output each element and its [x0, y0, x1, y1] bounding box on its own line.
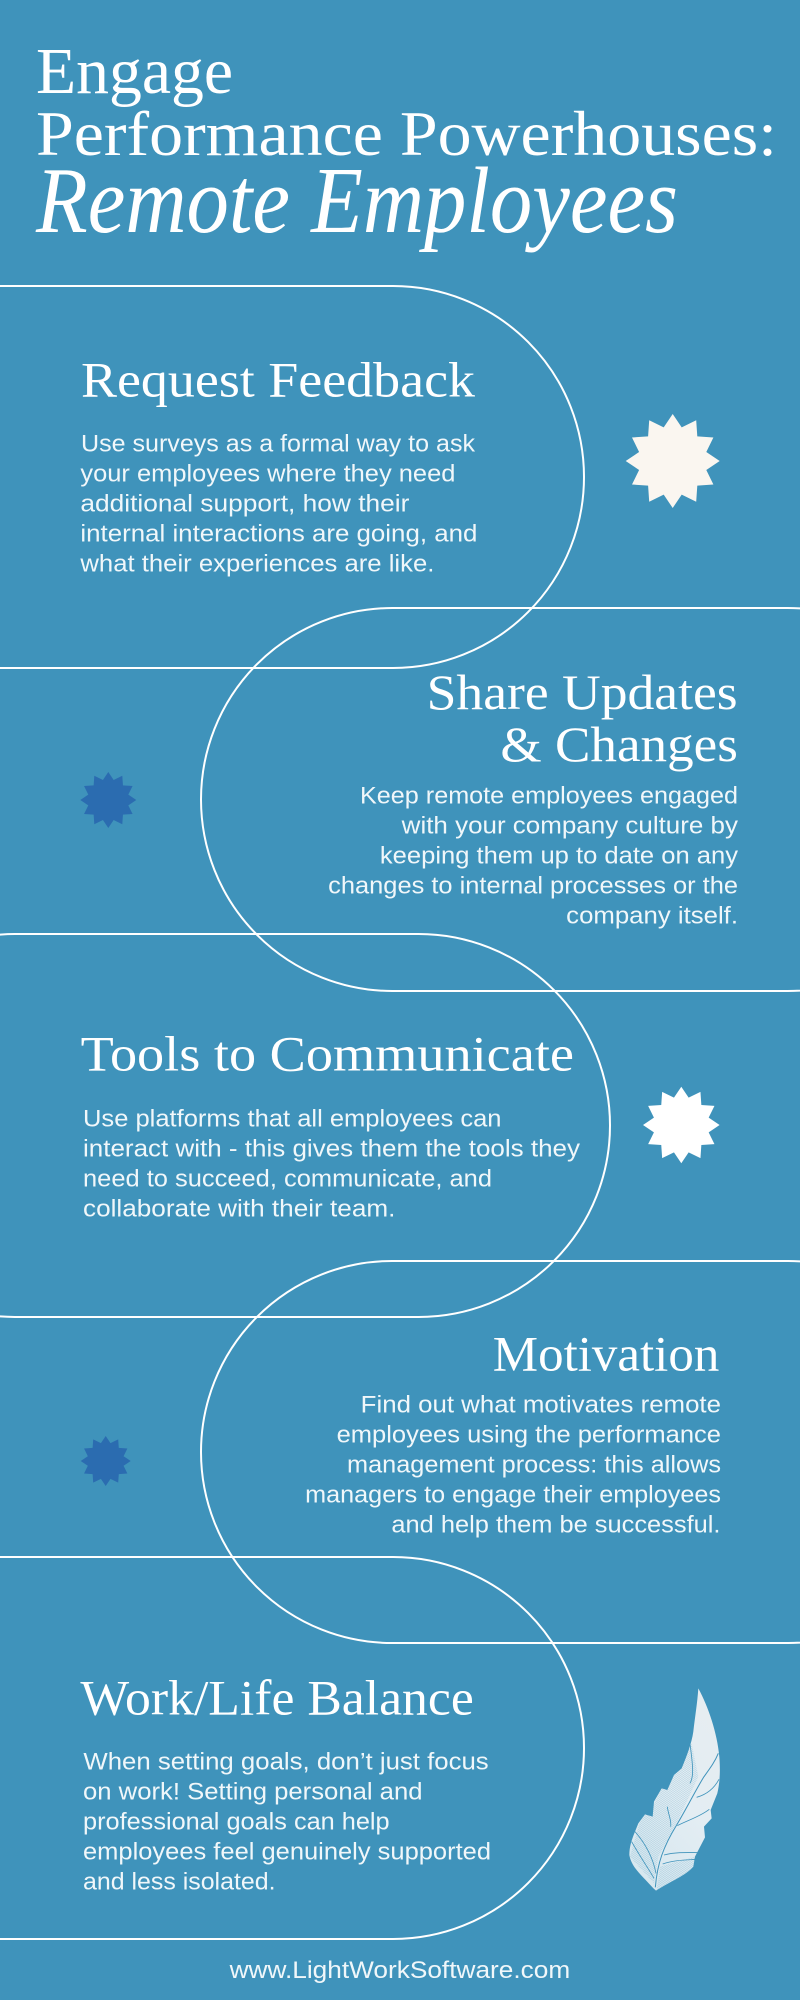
body text: management process: this allows [347, 1452, 721, 1479]
pill outline [0, 286, 584, 668]
body text: changes to internal processes or the [328, 872, 738, 899]
heading [427, 664, 738, 772]
title: Performance Powerhouses: [36, 98, 777, 169]
heading: Work/Life Balance [80, 1669, 474, 1725]
heading: Motivation [493, 1326, 719, 1382]
icon: white starburst [643, 1087, 720, 1163]
body text: company itself. [566, 902, 738, 929]
body text [305, 1392, 721, 1539]
panel: share updates and changes [201, 608, 800, 991]
body text: employees using the performance [337, 1422, 721, 1449]
title [35, 35, 777, 253]
body text [79, 431, 477, 578]
panel: work/life balance [0, 1557, 584, 1939]
body text: Use surveys as a formal way to ask [81, 431, 476, 458]
body text: keeping them up to date on any [380, 842, 738, 869]
body text: need to succeed, communicate, and [83, 1166, 492, 1193]
pill outline [201, 608, 800, 991]
body text: with your company culture by [401, 812, 738, 839]
heading: Request Feedback [81, 352, 475, 408]
title: Remote Employees [35, 149, 678, 253]
panel: request feedback [0, 286, 584, 668]
body text: Find out what motivates remote [361, 1392, 721, 1419]
body text: Keep remote employees engaged [360, 782, 738, 809]
body text: Use platforms that all employees can [83, 1106, 502, 1133]
body text: internal interactions are going, and [80, 521, 477, 548]
heading: Tools to Communicate [81, 1026, 574, 1082]
body text: When setting goals, don’t just focus [83, 1748, 489, 1775]
title: Engage [36, 35, 233, 108]
panel: tools to communicate [0, 934, 610, 1317]
body text [328, 782, 738, 929]
icon: small blue starburst [81, 1436, 131, 1486]
body text: collaborate with their team. [83, 1196, 395, 1223]
heading: Share Updates [427, 664, 738, 720]
pill outline [201, 1261, 800, 1643]
body text: managers to engage their employees [305, 1482, 721, 1509]
footer url: www.LightWorkSoftware.com [229, 1957, 570, 1984]
icon: blue starburst [80, 772, 136, 828]
body text: professional goals can help [83, 1808, 390, 1835]
body text: interact with - this gives them the tools they [83, 1136, 580, 1163]
body text: what their experiences are like. [79, 551, 434, 578]
body text: additional support, how their [80, 491, 409, 518]
pill outline [0, 1557, 584, 1939]
icon: cream starburst [626, 414, 720, 508]
body text [83, 1748, 491, 1895]
body text: employees feel genuinely supported [83, 1838, 491, 1865]
body text [83, 1106, 580, 1223]
body text: on work! Setting personal and [83, 1778, 422, 1805]
heading: & Changes [500, 716, 738, 772]
body text: and help them be successful. [391, 1512, 720, 1539]
icon: feather [629, 1688, 720, 1891]
pill outline [0, 934, 610, 1317]
body text: your employees where they need [80, 461, 455, 488]
body text: and less isolated. [83, 1868, 276, 1895]
panel: motivation [201, 1261, 800, 1643]
